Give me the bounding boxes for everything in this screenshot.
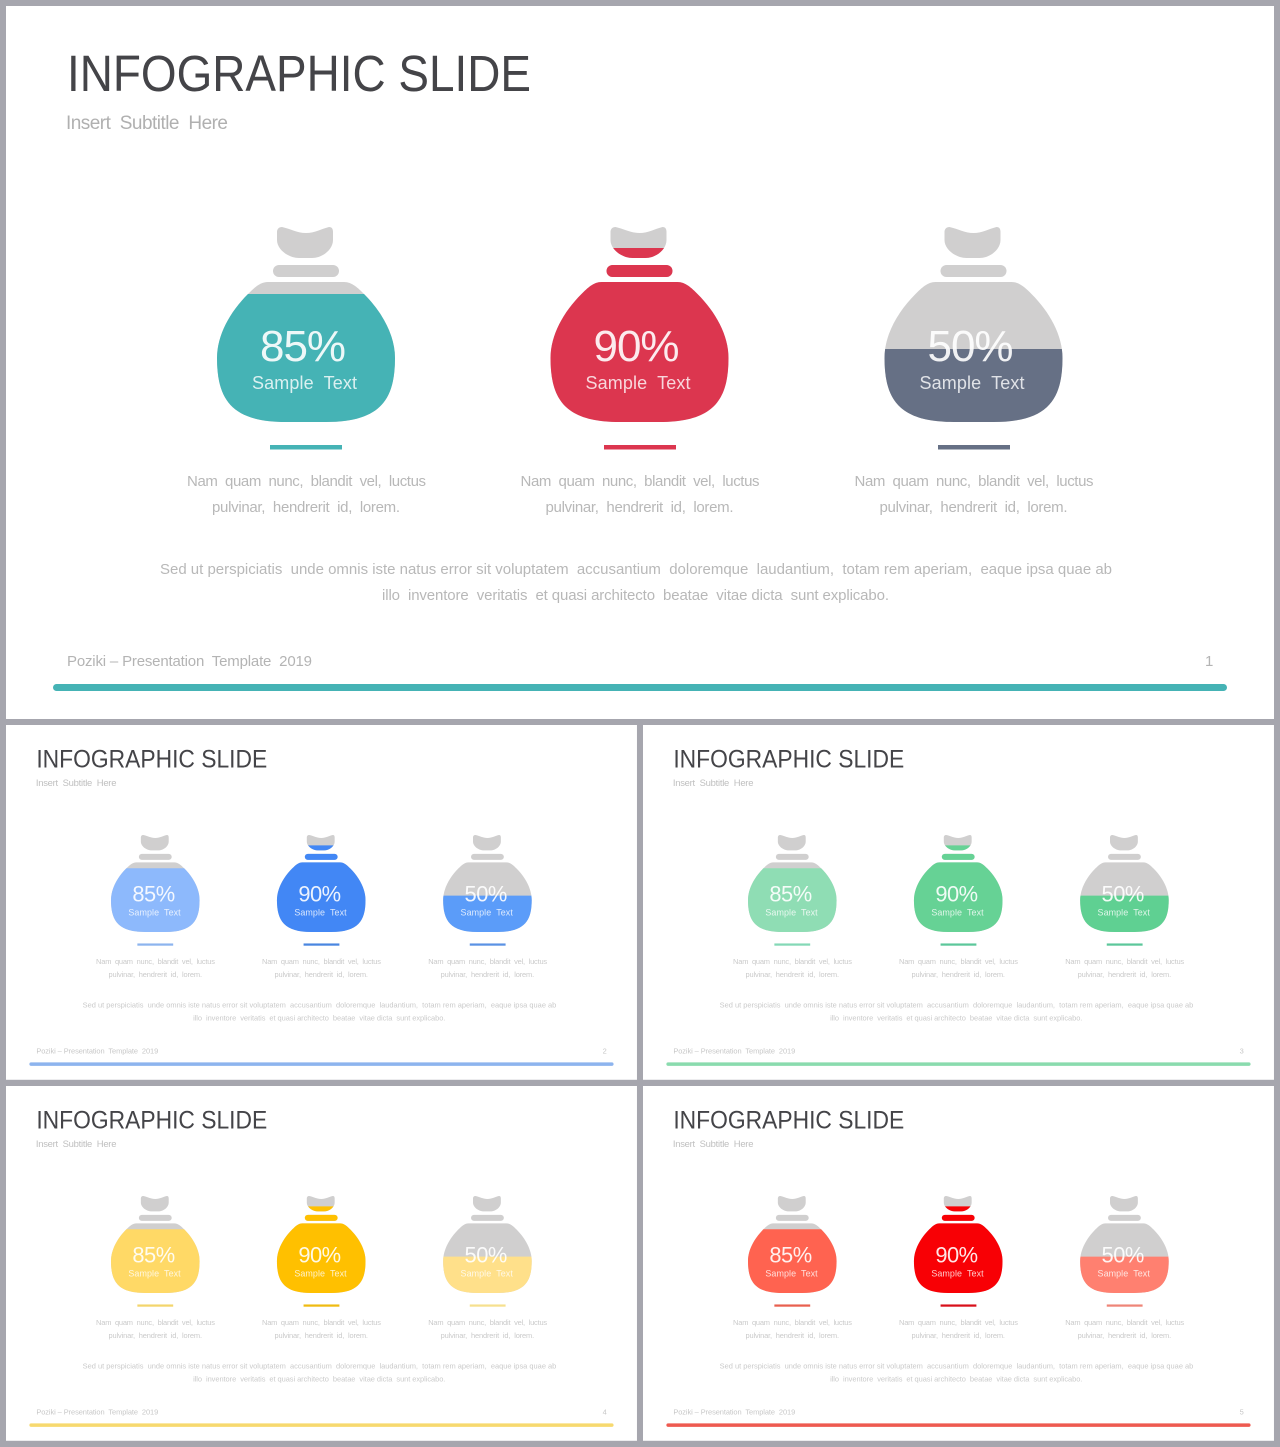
bag chart: 50%: 50% [928, 322, 1014, 371]
captions: Nam quam nunc, blandit vel, luctus [899, 1318, 1018, 1327]
bag chart: 90% [914, 1196, 1003, 1293]
captions: pulvinar, hendrerit id, lorem. [911, 1331, 1005, 1340]
title: INFOGRAPHIC SLIDE [36, 745, 267, 773]
footer: Poziki – Presentation Template 2019 [36, 1407, 158, 1416]
bag chart: 85%: Sample Text [128, 908, 181, 918]
bag chart: 50%: 50% [465, 882, 507, 907]
bag chart: 85%: 85% [132, 1243, 175, 1268]
captions: Nam quam nunc, blandit vel, luctus [96, 957, 215, 966]
body paragraph: illo inventore veritatis et quasi architecto beatae vitae dicta sunt explicabo. [830, 1375, 1082, 1384]
caption 1: pulvinar, hendrerit id, lorem. [212, 499, 400, 516]
body paragraph: illo inventore veritatis et quasi architecto beatae vitae dicta sunt explicabo. [830, 1014, 1082, 1023]
bag chart: 50%: Sample Text [461, 1269, 513, 1279]
bag chart: 50%: 50% [1102, 882, 1144, 907]
bag chart: 90%: 90% [935, 1243, 978, 1268]
captions: pulvinar, hendrerit id, lorem. [441, 970, 534, 979]
page number: 5 [1240, 1407, 1244, 1416]
captions: Nam quam nunc, blandit vel, luctus [733, 957, 852, 966]
bag chart: 85% [748, 835, 837, 932]
footer: Poziki – Presentation Template 2019 [67, 653, 312, 670]
footer bar [29, 1062, 614, 1066]
bag chart: 50%: Sample Text [461, 908, 513, 918]
subtitle: Insert Subtitle Here [36, 1139, 116, 1150]
panel: slide 2, blue [6, 725, 637, 1080]
caption 1: Nam quam nunc, blandit vel, luctus [187, 473, 426, 490]
bag chart: 90%: Sample Text [294, 908, 347, 918]
subtitle: Insert Subtitle Here [36, 778, 116, 789]
caption 3 [854, 473, 1094, 516]
captions: Nam quam nunc, blandit vel, luctus [428, 957, 547, 966]
bag chart: 85% [748, 1196, 837, 1293]
body paragraph: Sed ut perspiciatis unde omnis iste natus error sit voluptatem accusantium doloremque laudantium, totam rem aperiam, eaque ipsa quae ab [720, 1001, 1193, 1010]
page number: 1 [1205, 653, 1213, 670]
captions: pulvinar, hendrerit id, lorem. [1078, 1331, 1171, 1340]
bag chart: 90%: Sample Text [586, 373, 690, 393]
captions: Nam quam nunc, blandit vel, luctus [96, 1318, 215, 1327]
captions [733, 1318, 1184, 1340]
bag chart: 85%: 85% [132, 882, 175, 907]
bag chart: 85%: 85% [769, 882, 812, 907]
title: INFOGRAPHIC SLIDE [673, 745, 904, 773]
body paragraph: Sed ut perspiciatis unde omnis iste natus error sit voluptatem accusantium doloremque laudantium, totam rem aperiam, eaque ipsa quae ab [83, 1001, 556, 1010]
title: INFOGRAPHIC SLIDE [67, 45, 531, 102]
captions: Nam quam nunc, blandit vel, luctus [1065, 1318, 1184, 1327]
bag chart: 85%: 85% [769, 1243, 812, 1268]
bag chart: 85% [111, 1196, 200, 1293]
bag chart: 50%: Sample Text [1098, 908, 1150, 918]
captions: Nam quam nunc, blandit vel, luctus [733, 1318, 852, 1327]
title: INFOGRAPHIC SLIDE [673, 1106, 904, 1134]
footer bar [666, 1423, 1251, 1427]
panel: slide 3, green [643, 725, 1274, 1080]
body paragraph [720, 1001, 1193, 1023]
body paragraph [83, 1001, 556, 1023]
captions: pulvinar, hendrerit id, lorem. [109, 1331, 202, 1340]
bag chart: 90%: Sample Text [931, 908, 984, 918]
captions: pulvinar, hendrerit id, lorem. [109, 970, 202, 979]
body paragraph [720, 1362, 1193, 1384]
bag chart: 85%: Sample Text [252, 373, 357, 393]
bag chart: 50% [1080, 835, 1169, 932]
captions: pulvinar, hendrerit id, lorem. [441, 1331, 534, 1340]
captions [733, 957, 1184, 979]
captions: Nam quam nunc, blandit vel, luctus [262, 957, 381, 966]
bag chart: 85% [111, 835, 200, 932]
captions: pulvinar, hendrerit id, lorem. [746, 970, 839, 979]
caption 2: Nam quam nunc, blandit vel, luctus [520, 473, 760, 490]
page number: 2 [603, 1046, 607, 1055]
footer: Poziki – Presentation Template 2019 [673, 1046, 795, 1055]
subtitle: Insert Subtitle Here [66, 113, 228, 134]
caption 2: pulvinar, hendrerit id, lorem. [546, 499, 734, 516]
title: INFOGRAPHIC SLIDE [36, 1106, 267, 1134]
bag chart: 90%: Sample Text [294, 1269, 347, 1279]
panel: slide 5, red [643, 1086, 1274, 1441]
captions: pulvinar, hendrerit id, lorem. [274, 1331, 368, 1340]
bag chart: 50% [443, 1196, 532, 1293]
captions: pulvinar, hendrerit id, lorem. [746, 1331, 839, 1340]
bag chart: 90%: 90% [298, 882, 341, 907]
bag chart: 90% [277, 1196, 366, 1293]
caption 2 [520, 473, 760, 516]
footer bar [53, 684, 1227, 691]
subtitle: Insert Subtitle Here [673, 778, 753, 789]
body paragraph: Sed ut perspiciatis unde omnis iste natus error sit voluptatem accusantium doloremque laudantium, totam rem aperiam, eaque ipsa quae ab [160, 561, 1112, 578]
bag chart: 90% [550, 227, 728, 422]
bag chart: 50% [1080, 1196, 1169, 1293]
bag chart: 50%: Sample Text [1098, 1269, 1150, 1279]
body paragraph: Sed ut perspiciatis unde omnis iste natus error sit voluptatem accusantium doloremque laudantium, totam rem aperiam, eaque ipsa quae ab [720, 1362, 1193, 1371]
captions: Nam quam nunc, blandit vel, luctus [899, 957, 1018, 966]
bag chart: 90% [914, 835, 1003, 932]
captions: Nam quam nunc, blandit vel, luctus [428, 1318, 547, 1327]
footer: Poziki – Presentation Template 2019 [36, 1046, 158, 1055]
caption 1 [187, 473, 426, 516]
bag chart: 50% [884, 227, 1062, 422]
caption 3: pulvinar, hendrerit id, lorem. [880, 499, 1068, 516]
bag chart: 90%: Sample Text [931, 1269, 984, 1279]
page number: 4 [603, 1407, 607, 1416]
captions: pulvinar, hendrerit id, lorem. [274, 970, 368, 979]
subtitle: Insert Subtitle Here [673, 1139, 753, 1150]
captions [96, 957, 547, 979]
bag chart: 50%: Sample Text [920, 373, 1024, 393]
bag chart: 90%: 90% [594, 322, 680, 371]
bag chart: 50%: 50% [465, 1243, 507, 1268]
footer bar [666, 1062, 1251, 1066]
body paragraph: Sed ut perspiciatis unde omnis iste natus error sit voluptatem accusantium doloremque laudantium, totam rem aperiam, eaque ipsa quae ab [83, 1362, 556, 1371]
captions [96, 1318, 547, 1340]
captions: pulvinar, hendrerit id, lorem. [1078, 970, 1171, 979]
body paragraph: illo inventore veritatis et quasi architecto beatae vitae dicta sunt explicabo. [193, 1375, 445, 1384]
bag chart: 85%: Sample Text [765, 908, 818, 918]
footer bar [29, 1423, 614, 1427]
bag chart: 90% [277, 835, 366, 932]
bag chart: 85% [217, 227, 395, 422]
body paragraph [160, 561, 1112, 604]
bag chart: 50% [443, 835, 532, 932]
body paragraph [83, 1362, 556, 1384]
captions: Nam quam nunc, blandit vel, luctus [1065, 957, 1184, 966]
captions: Nam quam nunc, blandit vel, luctus [262, 1318, 381, 1327]
panel: main slide, teal red slate [6, 6, 1274, 719]
bag chart: 90%: 90% [298, 1243, 341, 1268]
caption 3: Nam quam nunc, blandit vel, luctus [854, 473, 1094, 490]
footer: Poziki – Presentation Template 2019 [673, 1407, 795, 1416]
bag chart: 85%: Sample Text [128, 1269, 181, 1279]
page number: 3 [1240, 1046, 1244, 1055]
bag chart: 50%: 50% [1102, 1243, 1144, 1268]
captions: pulvinar, hendrerit id, lorem. [911, 970, 1005, 979]
body paragraph: illo inventore veritatis et quasi architecto beatae vitae dicta sunt explicabo. [382, 587, 889, 604]
bag chart: 90%: 90% [935, 882, 978, 907]
panel: slide 4, yellow [6, 1086, 637, 1441]
bag chart: 85%: 85% [260, 322, 346, 371]
body paragraph: illo inventore veritatis et quasi architecto beatae vitae dicta sunt explicabo. [193, 1014, 445, 1023]
bag chart: 85%: Sample Text [765, 1269, 818, 1279]
